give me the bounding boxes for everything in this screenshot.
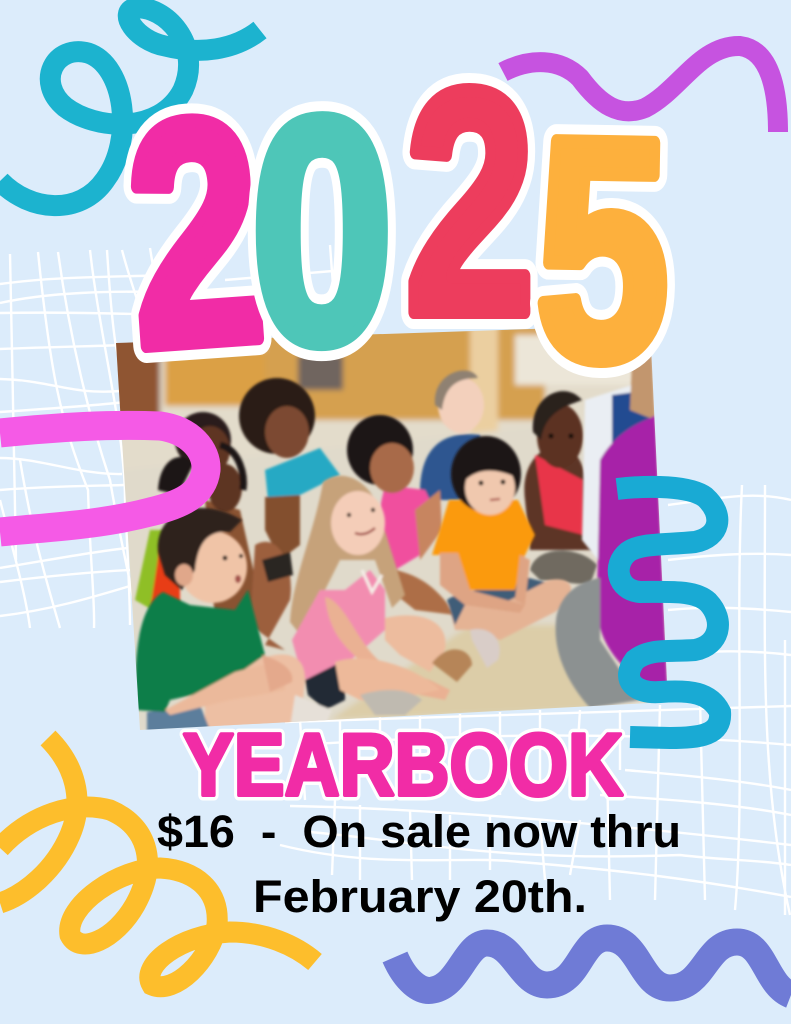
digit 2 red: 2	[405, 24, 535, 379]
child in blue stripes	[420, 434, 490, 500]
child behind pink loop	[175, 412, 231, 468]
digit 0 teal: 0	[250, 50, 394, 410]
digit 5 orange: 5	[533, 74, 672, 427]
child with curly hair in teal	[239, 378, 315, 454]
sale text: February 20th.	[253, 871, 587, 922]
scribble: teal right squiggle	[617, 487, 720, 738]
heading: YEARBOOK: YEARBOOK	[183, 715, 623, 814]
heading: YEARBOOK: YEARBOOK	[183, 715, 623, 814]
scribble: purple top right	[503, 46, 778, 132]
child in pink top	[380, 486, 430, 570]
scribble: periwinkle wave	[395, 938, 791, 995]
child in red top	[524, 445, 593, 550]
front row children	[135, 436, 571, 735]
grid lines: right and bottom	[280, 485, 791, 915]
grid lines: behind numerals	[225, 245, 345, 325]
blond girl	[290, 476, 405, 637]
photo: children on classroom floor	[100, 320, 680, 740]
digit 2 red: 2	[405, 24, 535, 379]
scribble: pink loop	[0, 425, 206, 532]
girl in orange shirt	[448, 579, 571, 640]
sale text	[157, 806, 681, 922]
digit 5 orange: 5	[533, 74, 672, 427]
grid lines: left	[0, 248, 170, 628]
boy in green shirt	[205, 655, 305, 730]
scribble: teal top left	[0, 8, 260, 206]
photo background	[100, 320, 680, 740]
girl with braids	[133, 528, 164, 609]
back row children	[135, 371, 597, 650]
legs and dark shorts behind	[250, 542, 291, 650]
digit 2 pink: 2	[118, 52, 273, 415]
sale text: $16 - On sale now thru	[157, 806, 681, 857]
scribble: yellow lower left	[0, 738, 315, 987]
numeral 2025	[118, 24, 672, 427]
digit 0 teal: 0	[250, 50, 394, 410]
teacher in purple and grey	[556, 350, 668, 708]
digit 2 pink: 2	[118, 52, 273, 415]
